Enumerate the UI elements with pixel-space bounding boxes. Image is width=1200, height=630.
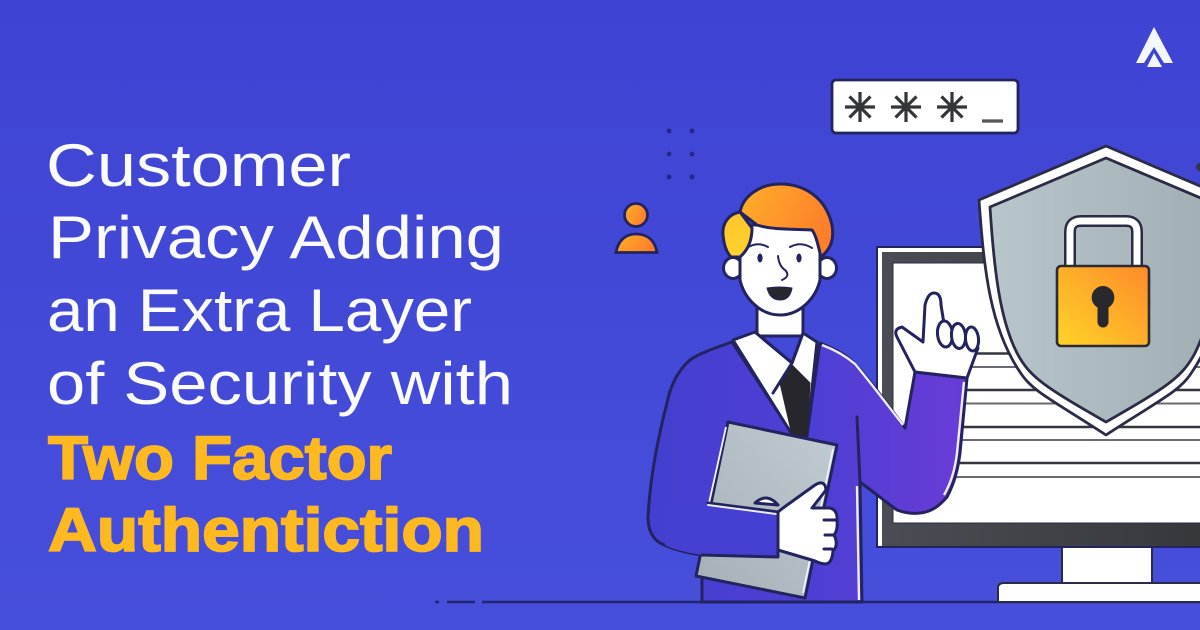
- keyhole: [1092, 286, 1114, 328]
- shield edge fragment: [1196, 163, 1200, 171]
- padlock shackle: [1070, 221, 1137, 268]
- tablet highlight: [709, 427, 833, 593]
- title: [46, 132, 513, 564]
- icon: brand logo: [1136, 27, 1173, 67]
- left arm sleeve: [665, 500, 778, 557]
- tablet: [696, 422, 837, 598]
- curled fingers: [936, 320, 980, 352]
- padlock body: [1057, 266, 1149, 346]
- frame highlight: [878, 248, 1200, 546]
- raised hand: [896, 293, 980, 378]
- nose: [778, 256, 787, 280]
- shield face: [990, 158, 1200, 422]
- title line: an Extra Layer: an Extra Layer: [47, 277, 472, 344]
- dot grid: [667, 129, 694, 179]
- left arm edge: [702, 503, 778, 557]
- title line: of Security with: of Security with: [47, 350, 513, 417]
- shirt and collar: [733, 332, 817, 436]
- head: [723, 184, 836, 315]
- sleeve highlight: [708, 505, 776, 514]
- necktie: [780, 365, 810, 435]
- person: [648, 184, 980, 602]
- asterisk characters: [845, 92, 1003, 122]
- eyes: [757, 254, 763, 262]
- padlock: [1057, 221, 1149, 346]
- title line: Customer: Customer: [46, 132, 351, 199]
- screen text lines: [950, 354, 1200, 477]
- title line: Two Factor: Two Factor: [48, 424, 392, 492]
- holding hand finger lines: [824, 520, 836, 549]
- monitor frame: [877, 247, 1200, 547]
- jacket fold line: [857, 417, 860, 482]
- monitor base: [998, 583, 1200, 602]
- suit highlights: [822, 345, 964, 600]
- shackle highlight: [1070, 221, 1137, 268]
- holding hand: [778, 483, 837, 564]
- mouth: [767, 287, 792, 300]
- monitor: [877, 247, 1200, 602]
- title line: Authentiction: Authentiction: [48, 496, 484, 564]
- icon: user: [616, 204, 657, 252]
- hair top: [740, 184, 833, 257]
- tablet leg line: [700, 578, 704, 602]
- face: [740, 225, 820, 315]
- monitor screen: [893, 263, 1200, 523]
- shield: [979, 146, 1200, 435]
- thumb knuckle on tablet: [755, 498, 778, 505]
- password field: [832, 80, 1018, 133]
- eyebrows: [747, 244, 812, 248]
- ears: [724, 258, 742, 278]
- title line: Privacy Adding: Privacy Adding: [48, 204, 504, 271]
- monitor stand: [1062, 545, 1152, 583]
- jacket: [648, 342, 967, 602]
- hair side: [723, 212, 752, 257]
- neck: [757, 300, 803, 336]
- shield rim: [979, 146, 1200, 435]
- ground line: [435, 601, 1200, 603]
- collar folds: [755, 332, 803, 393]
